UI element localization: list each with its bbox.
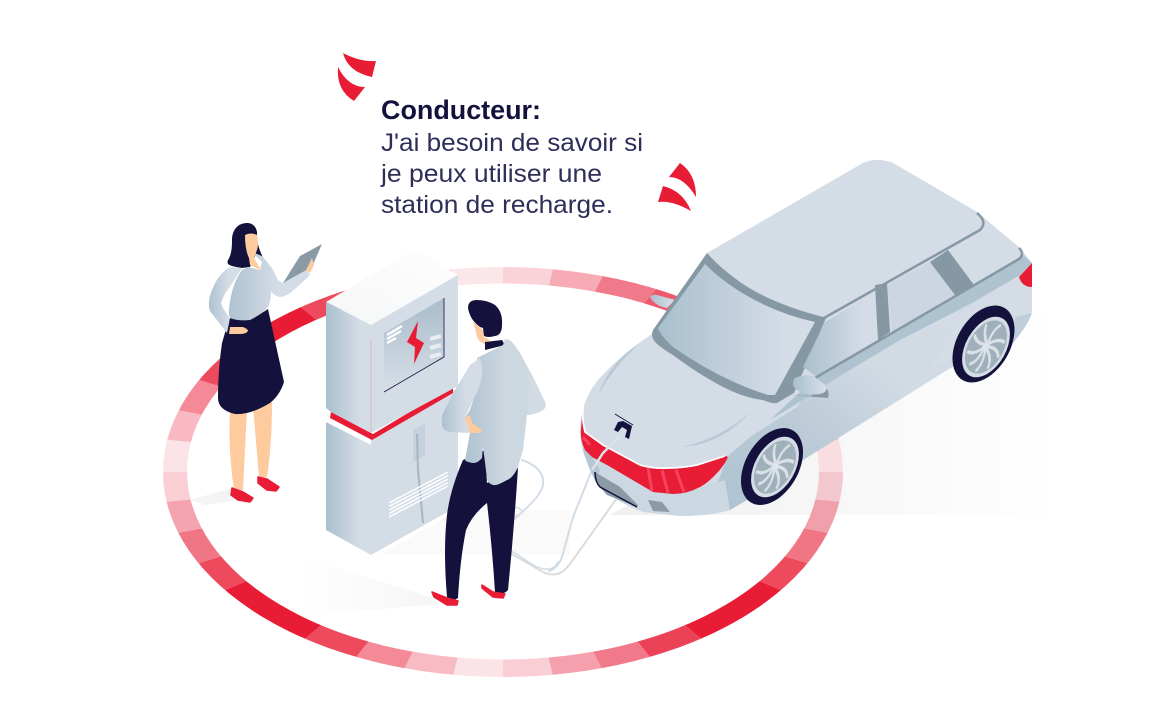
legs bbox=[230, 402, 272, 490]
red charging ring bbox=[163, 267, 843, 677]
driver quote: je peux utiliser une bbox=[380, 160, 602, 188]
ground shadows of people and station bbox=[190, 488, 570, 616]
hand bbox=[465, 415, 482, 433]
front side window bbox=[803, 293, 878, 377]
hood highlights bbox=[598, 343, 750, 447]
fog light bbox=[648, 500, 670, 512]
jacket sleeve bbox=[512, 342, 546, 415]
face bbox=[473, 322, 490, 344]
red front grille bbox=[581, 407, 728, 494]
rear wheel bbox=[940, 295, 1027, 393]
tablet bbox=[283, 244, 322, 283]
station screen bbox=[384, 298, 444, 392]
hair bbox=[468, 300, 502, 337]
intake dark edge bbox=[595, 472, 637, 507]
car body silhouette bbox=[580, 160, 1032, 516]
ground shadow of car bbox=[610, 313, 1060, 515]
blouse bbox=[209, 253, 310, 333]
b pillar bbox=[875, 283, 890, 340]
rear light bbox=[1019, 263, 1032, 287]
shoes bbox=[432, 585, 505, 605]
car belt band bbox=[770, 255, 1032, 420]
hand on hip bbox=[229, 327, 248, 334]
shoes bbox=[231, 477, 279, 502]
hand on tablet bbox=[306, 258, 314, 273]
rear lower shade bbox=[1013, 313, 1032, 343]
car side panel bbox=[715, 256, 1032, 510]
bumper side shade bbox=[582, 447, 600, 482]
car bbox=[580, 160, 1032, 516]
windshield frame bbox=[652, 253, 826, 403]
woman with tablet bbox=[209, 223, 322, 502]
charging station bbox=[326, 249, 458, 555]
hair bbox=[228, 223, 263, 268]
windshield bbox=[658, 264, 815, 395]
collar bbox=[485, 340, 505, 350]
lower air intake bbox=[595, 472, 638, 507]
charging cables bbox=[510, 460, 617, 574]
front wheel bbox=[728, 417, 816, 516]
front bumper shade bbox=[582, 447, 730, 516]
speech spark top right bbox=[658, 163, 696, 211]
roof and side trim bbox=[815, 213, 1022, 378]
face and neck bbox=[245, 234, 261, 270]
middle side window bbox=[887, 262, 955, 332]
station lower box bbox=[326, 388, 458, 555]
roof bbox=[707, 160, 984, 317]
station upper box bbox=[326, 249, 458, 433]
icon: lightning bolt bbox=[407, 321, 424, 364]
panel below belt bbox=[930, 277, 1032, 370]
far mirror bbox=[650, 295, 675, 308]
station red band bbox=[330, 386, 453, 440]
driver quote bbox=[380, 95, 643, 219]
rear window bbox=[950, 232, 1020, 283]
driver quote: station de recharge. bbox=[381, 191, 613, 219]
skirt bbox=[218, 309, 284, 414]
jacket bbox=[465, 339, 546, 485]
driver quote: J'ai besoin de savoir si bbox=[381, 129, 643, 157]
charging plug cable on car bbox=[592, 436, 620, 470]
driver quote: Conducteur: bbox=[381, 95, 541, 125]
trousers bbox=[445, 450, 518, 600]
bonnet logo bbox=[614, 414, 633, 439]
c pillar bbox=[930, 250, 974, 295]
man bbox=[432, 300, 546, 605]
near mirror bbox=[790, 375, 829, 398]
speech spark top left bbox=[338, 53, 376, 101]
arm bbox=[442, 358, 482, 433]
